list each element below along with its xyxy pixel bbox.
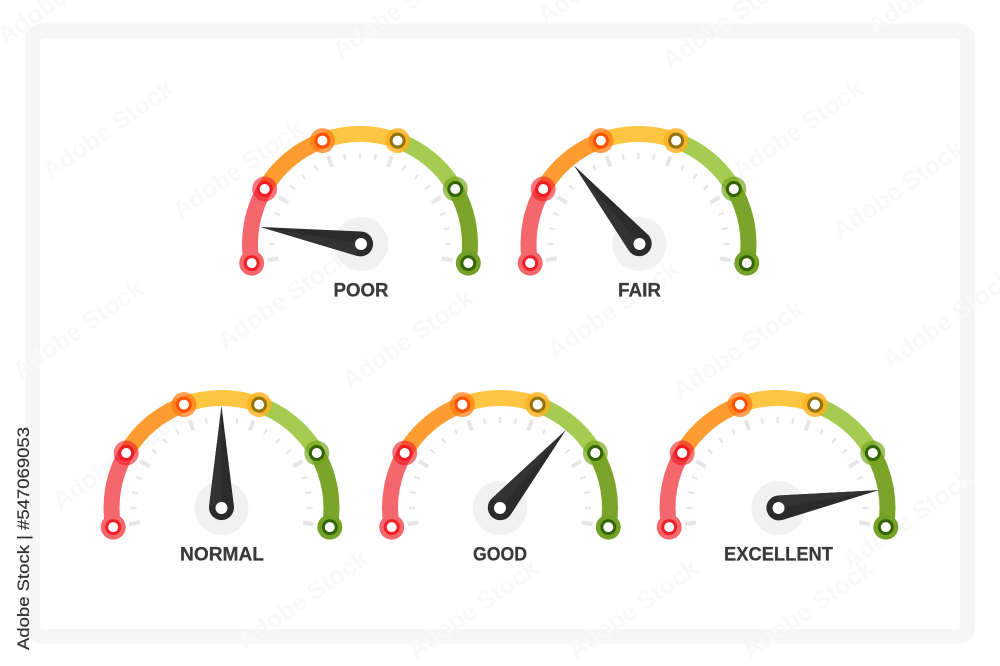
- gauge: good: [379, 392, 621, 566]
- excellent label: EXCELLENT: [724, 544, 833, 566]
- watermark: Adobe Stock: [542, 254, 684, 365]
- poor label: POOR: [334, 280, 389, 302]
- poor ticks: [268, 153, 452, 260]
- fair hub: [612, 217, 666, 271]
- good needle: [483, 422, 575, 525]
- normal hub: [194, 481, 248, 535]
- gauge: fair: [518, 128, 759, 302]
- watermark: Adobe Stock: [727, 74, 869, 185]
- normal dial arc: [101, 392, 342, 540]
- poor needle: [258, 215, 375, 258]
- watermark: Adobe Stock: [737, 554, 879, 665]
- watermark: Adobe Stock: [47, 404, 189, 515]
- good hub: [473, 481, 527, 535]
- gauge: excellent: [657, 392, 898, 566]
- fair label: FAIR: [618, 280, 661, 302]
- watermark: Adobe Stock: [827, 134, 969, 245]
- poor dial arc: [239, 128, 481, 276]
- stock id side text: Adobe Stock | #547069053: [14, 427, 33, 650]
- good dial arc: [379, 392, 621, 540]
- watermark: Adobe Stock: [232, 544, 374, 655]
- watermark: Adobe Stock: [212, 244, 354, 355]
- good ticks: [408, 417, 592, 524]
- watermark: Adobe Stock: [402, 554, 544, 665]
- excellent ticks: [685, 417, 870, 524]
- watermark: Adobe Stock: [7, 274, 149, 385]
- excellent needle: [764, 478, 881, 522]
- watermark: Adobe Stock: [562, 554, 704, 665]
- fair dial arc: [518, 128, 759, 276]
- watermark: Adobe Stock: [37, 74, 179, 185]
- watermark: Adobe Stock: [837, 464, 979, 575]
- fair needle: [565, 158, 657, 261]
- excellent hub: [752, 481, 806, 535]
- excellent dial arc: [657, 392, 898, 540]
- gauge: normal: [101, 392, 342, 566]
- normal ticks: [129, 417, 314, 524]
- normal needle: [209, 406, 234, 520]
- gauge: poor: [239, 128, 481, 302]
- good label: GOOD: [473, 544, 527, 566]
- normal label: NORMAL: [180, 544, 264, 566]
- fair ticks: [546, 153, 731, 260]
- watermark: Adobe Stock: [667, 294, 809, 405]
- watermark: Adobe Stock: [167, 114, 309, 225]
- watermark: Adobe Stock: [337, 284, 479, 395]
- poor hub: [334, 217, 388, 271]
